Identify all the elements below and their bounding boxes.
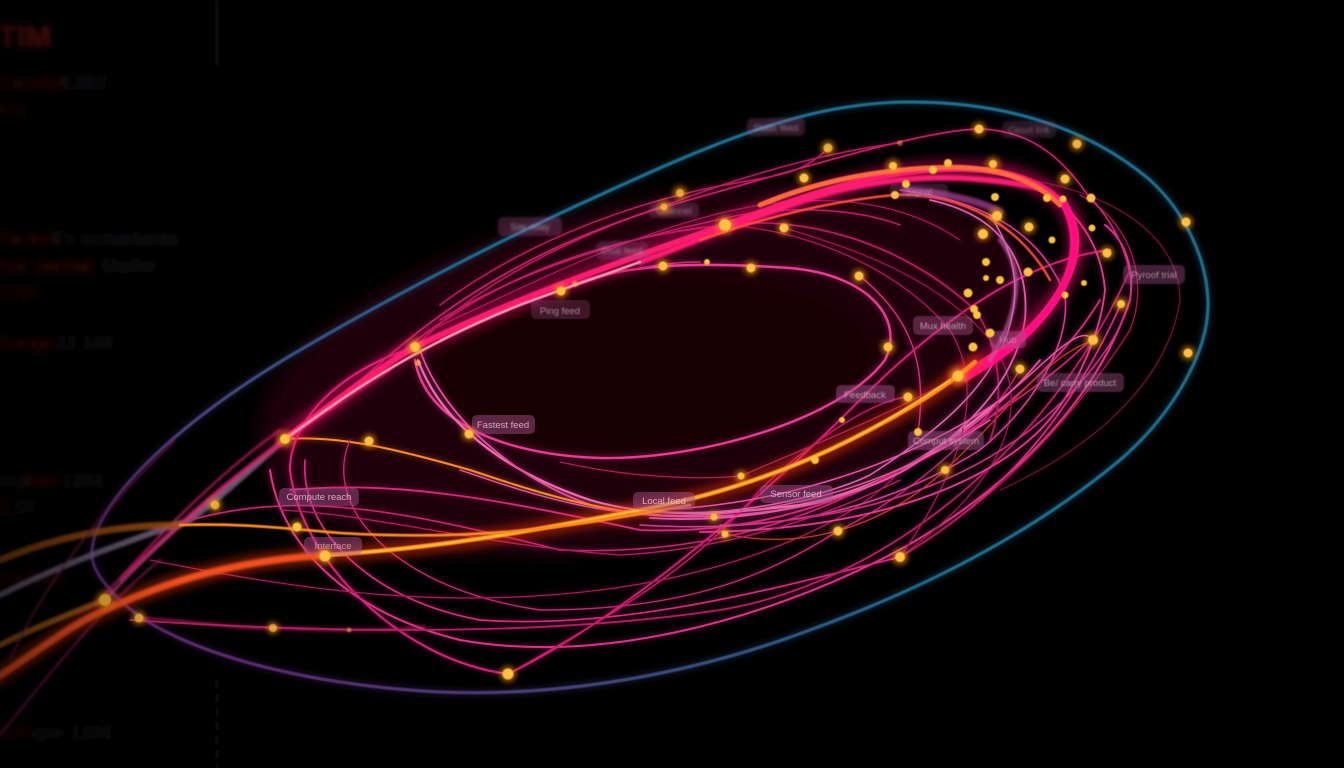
text block: lower: feet	[24, 471, 58, 492]
label: Hub	[999, 335, 1017, 346]
label	[908, 431, 984, 450]
label	[1002, 121, 1056, 138]
label: Feedback	[844, 390, 886, 401]
left depth-of-field fade	[0, 0, 180, 768]
label	[649, 203, 699, 218]
label	[913, 316, 973, 335]
text block: lower: 1384	[61, 471, 104, 492]
label: Local feed	[642, 496, 686, 507]
text block: middle: 22,144	[55, 333, 114, 354]
flow lines: left fading strands	[0, 370, 425, 735]
label	[747, 118, 805, 136]
label	[760, 485, 833, 503]
label: Site relay	[510, 222, 550, 233]
label	[1037, 373, 1124, 392]
label: Dual feed	[602, 246, 642, 257]
label: Fastest feed	[477, 420, 529, 431]
label: Compute reach	[287, 492, 351, 503]
node glow halos	[96, 122, 1195, 682]
text block: bottom: gre 1104	[35, 723, 111, 744]
label	[890, 184, 948, 199]
second orange line	[180, 505, 690, 535]
text block: middle	[0, 229, 179, 354]
main orange-yellow flow line	[0, 362, 975, 682]
label	[990, 331, 1026, 348]
text block: middle: Tx ormarlants	[53, 229, 179, 250]
label	[472, 415, 535, 434]
text block: top	[0, 73, 105, 120]
faint background axis lines	[130, 0, 225, 768]
label	[498, 217, 562, 236]
label	[1123, 265, 1185, 284]
label	[304, 537, 362, 555]
label: Comput system	[913, 436, 979, 447]
data node labels	[279, 118, 1185, 555]
label: Cloud link	[1008, 125, 1050, 136]
text block: lower: my	[0, 471, 28, 492]
outer orbit ring	[92, 102, 1208, 693]
label: Ping feed	[540, 306, 580, 317]
label: Channel	[656, 206, 692, 217]
label: Signal	[906, 187, 932, 198]
text block: lower: Ot	[15, 497, 37, 518]
label: Interface	[315, 541, 351, 552]
label: Static feed	[754, 123, 798, 134]
text block: top: 1383	[63, 73, 105, 94]
text block: middle: Stalke	[100, 256, 156, 277]
text block: lower	[0, 471, 104, 589]
label: Mux health	[920, 321, 966, 332]
orange upper band	[760, 167, 1060, 205]
label	[836, 385, 895, 403]
label	[633, 492, 695, 510]
background glow inside orbit	[223, 121, 1077, 619]
flow strands	[130, 129, 1180, 674]
text block: middle: Rar partial	[0, 256, 92, 277]
label: Be/ carry product	[1044, 378, 1117, 389]
blurred side text panel	[0, 19, 179, 744]
label	[531, 300, 590, 319]
label: Sensor feed	[770, 489, 822, 500]
label	[279, 488, 359, 506]
flow strands glow	[130, 129, 1180, 674]
main pink band	[285, 167, 1076, 439]
data nodes	[99, 124, 1192, 680]
text block: bottom	[0, 723, 111, 744]
label	[596, 241, 648, 260]
label: Pyroof trial	[1131, 270, 1177, 281]
